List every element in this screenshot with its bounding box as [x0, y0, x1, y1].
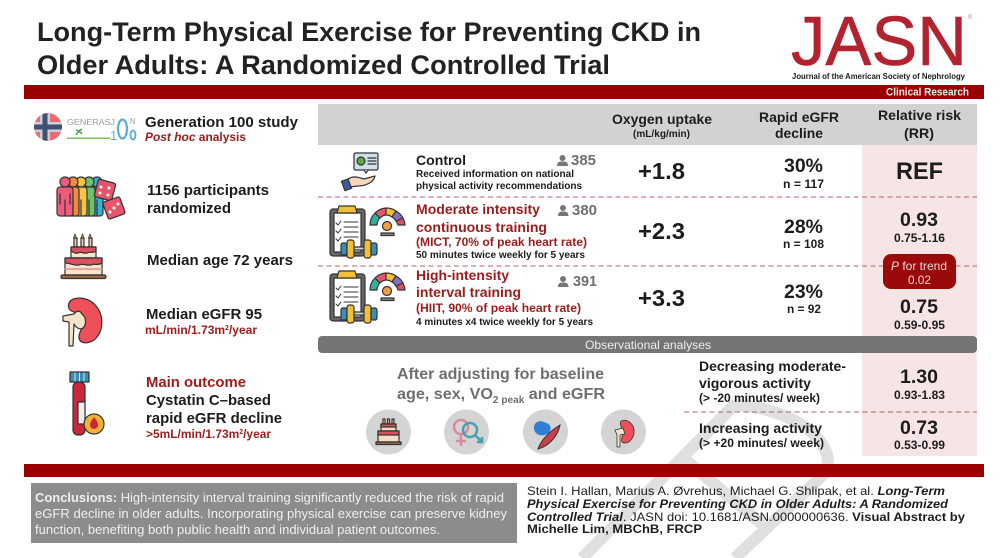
participant count: HIIT	[558, 273, 597, 290]
logo: Generasjon 100: GENERASJ	[67, 118, 115, 127]
text: MICT group: continuous training	[416, 219, 547, 235]
icon: participants and dice	[57, 177, 126, 220]
value: oxygen uptake MICT: +2.3	[638, 218, 685, 244]
text: median age: Median age 72 years	[147, 252, 293, 269]
text: increasing activity: Increasing activity	[699, 420, 822, 436]
value: decline HIIT: 23%	[784, 281, 823, 303]
row: moderate intensity	[330, 201, 945, 261]
citation: Michelle Lim, MBChB, FRCP	[527, 522, 702, 536]
logo: Generasjon 100: 1	[110, 128, 117, 143]
text: increasing activity	[699, 420, 824, 450]
icon: blood test tube	[70, 372, 104, 435]
text: study name: Post hoc analysis	[145, 130, 246, 144]
panel: conclusions	[31, 483, 517, 543]
value: relative risk reference: REF	[896, 158, 943, 185]
text: control group: Control	[416, 152, 466, 168]
text: HIIT group: (HIIT, 90% of peak heart rate)	[416, 301, 581, 315]
table header: Oxygen uptake	[612, 111, 712, 127]
value: oxygen uptake HIIT: +3.3	[638, 285, 685, 311]
relative risk background	[862, 353, 977, 456]
text: decreasing activity	[699, 358, 846, 405]
icon: kidney	[601, 410, 646, 454]
text: study name: Generation 100 study	[145, 114, 299, 131]
participant count: MICT	[558, 202, 597, 219]
value: decline control: 30%	[784, 155, 823, 177]
value: decline MICT: n = 108	[783, 237, 824, 251]
watermark	[582, 403, 828, 558]
text: decreasing activity: Decreasing moderate-	[699, 358, 846, 374]
row: control	[341, 152, 943, 192]
text: main outcome: >5mL/min/1.73m	[146, 427, 240, 441]
participant count: MICT: 380	[572, 202, 597, 219]
panel: study overview	[34, 113, 299, 441]
icon: clipboard, dumbbell and gauge	[330, 206, 405, 258]
text: participants: randomized	[147, 200, 231, 217]
table header: Relative risk	[878, 107, 961, 123]
panel: trial results table	[318, 104, 977, 336]
value: relative risk decreasing activity: 1.30	[900, 366, 938, 388]
text: adjustment note: 2 peak	[493, 395, 525, 406]
bottom red banner	[24, 464, 984, 477]
value: decline MICT: 28%	[784, 216, 823, 238]
callout: P for trend: 0.02	[908, 273, 931, 287]
value: relative risk HIIT	[894, 296, 945, 332]
relative risk column background	[862, 145, 977, 336]
journal logo: JASN	[791, 2, 967, 80]
value: decline control	[783, 155, 824, 191]
citation: Stein I. Hallan, Marius A. Øvrehus, Michael G. Shlipak, et al. Long-Term	[527, 484, 945, 498]
text: main outcome: /year	[243, 427, 271, 441]
table header: Rapid eGFR	[759, 109, 839, 125]
panel: conclusions: eGFR decline in older adults. Incorporating physical exercise can preserve kidney	[35, 507, 508, 521]
top banner: clinical research: Clinical Research	[886, 86, 969, 98]
icon: kidney	[63, 298, 102, 346]
text: median eGFR: 2	[225, 325, 229, 332]
icon: clipboard, dumbbell and gauge	[330, 271, 405, 323]
title: Older Adults: A Randomized Controlled Trial	[37, 50, 610, 80]
text: control group: Received information on national	[416, 169, 574, 180]
text: study name	[145, 114, 299, 144]
citation: Physical Exercise for Preventing CKD in Older Adults: A Randomized	[527, 497, 949, 511]
icon: VO2 peak muscle	[523, 410, 568, 454]
row dividers	[318, 197, 977, 266]
text: HIIT group: High-intensity	[416, 267, 509, 283]
icon: hand with info card	[341, 153, 378, 191]
row: high intensity	[330, 267, 945, 332]
value: relative risk decreasing activity	[894, 366, 945, 402]
table header: (RR)	[904, 125, 934, 141]
value: relative risk HIIT: 0.59-0.95	[894, 318, 945, 332]
title	[37, 17, 701, 80]
value: decline MICT	[783, 216, 824, 251]
banner: observational analyses	[318, 336, 977, 353]
journal logo: Journal of the American Society of Nephrology	[792, 72, 966, 81]
value: relative risk MICT	[894, 209, 945, 245]
value: relative risk decreasing activity: 0.93-1.83	[894, 388, 945, 402]
text: median eGFR: Median eGFR 95	[146, 306, 262, 323]
text: adjustment note: After adjusting for baseline	[397, 366, 604, 383]
text: participants	[147, 182, 269, 217]
text: adjustment note: and eGFR	[524, 386, 605, 403]
participant count: control	[557, 152, 596, 169]
logo: Generasjon 100	[67, 117, 136, 143]
top banner: clinical research	[24, 85, 984, 99]
value: relative risk MICT: 0.93	[900, 209, 938, 231]
text: main outcome: Cystatin C–based	[146, 392, 271, 409]
value: relative risk increasing activity: 0.73	[900, 417, 938, 439]
value: relative risk HIIT: 0.75	[900, 296, 938, 318]
value: decline control: n = 117	[783, 177, 824, 191]
text: decreasing activity: (> -20 minutes/ week)	[699, 391, 820, 405]
text: median eGFR: /year	[229, 323, 257, 337]
text: HIIT group: 4 minutes x4 twice weekly for 5 years	[416, 317, 593, 328]
value: oxygen uptake control: +1.8	[638, 158, 685, 184]
table header	[318, 104, 977, 145]
text: control group	[416, 152, 582, 192]
callout: P for trend	[883, 254, 956, 289]
title: Long-Term Physical Exercise for Preventing CKD in	[37, 17, 701, 47]
text: adjustment note	[397, 366, 605, 406]
icon: birthday cake	[61, 234, 106, 278]
citation: Controlled Trial . JASN doi: 10.1681/ASN.0000000636. Visual Abstract by	[527, 510, 965, 524]
banner: observational analyses: Observational analyses	[585, 338, 711, 352]
value: decline HIIT	[784, 281, 823, 316]
citation	[527, 484, 965, 536]
text: main outcome: rapid eGFR decline	[146, 410, 282, 427]
text: adjustment note: age, sex, VO	[397, 386, 492, 403]
table header: decline	[775, 125, 823, 141]
callout: P for trend: P for trend	[891, 259, 947, 273]
icon: sex	[444, 410, 489, 454]
text: main outcome: 2	[239, 429, 243, 436]
text: MICT group	[416, 201, 587, 261]
logo: Generasjon 100: N	[130, 117, 136, 126]
participant count: control: 385	[571, 152, 596, 169]
text: main outcome	[146, 374, 282, 441]
text: increasing activity: (> +20 minutes/ week)	[699, 436, 824, 450]
text: median eGFR: mL/min/1.73m	[145, 323, 225, 337]
text: median eGFR	[145, 306, 262, 337]
value: relative risk increasing activity: 0.53-0.99	[894, 438, 945, 452]
participant count: HIIT: 391	[573, 273, 597, 290]
value: relative risk increasing activity	[894, 417, 945, 452]
value: decline HIIT: n = 92	[787, 302, 821, 316]
table header: (mL/kg/min)	[633, 129, 690, 140]
panel: conclusions: function, benefiting both public health and individual patient outcomes.	[35, 523, 440, 537]
text: control group: physical activity recommendations	[416, 181, 582, 192]
text: HIIT group: interval training	[416, 284, 521, 300]
icon: Norway flag	[34, 113, 62, 141]
text: MICT group: 50 minutes twice weekly for 5 years	[416, 250, 585, 261]
text: main outcome: Main outcome	[146, 374, 246, 391]
value: relative risk MICT: 0.75-1.16	[894, 231, 945, 245]
panel: observational analyses	[366, 353, 977, 456]
text: MICT group: (MICT, 70% of peak heart rate)	[416, 235, 587, 249]
text: MICT group: Moderate intensity	[416, 201, 540, 217]
icon: age	[366, 410, 411, 454]
text: participants: 1156 participants	[147, 182, 269, 199]
text: decreasing activity: vigorous activity	[699, 375, 811, 391]
panel: conclusions: Conclusions: High-intensity interval training significantly reduced the risk of rapid	[35, 491, 504, 505]
text: HIIT group	[416, 267, 593, 328]
journal logo: ®	[968, 14, 973, 21]
